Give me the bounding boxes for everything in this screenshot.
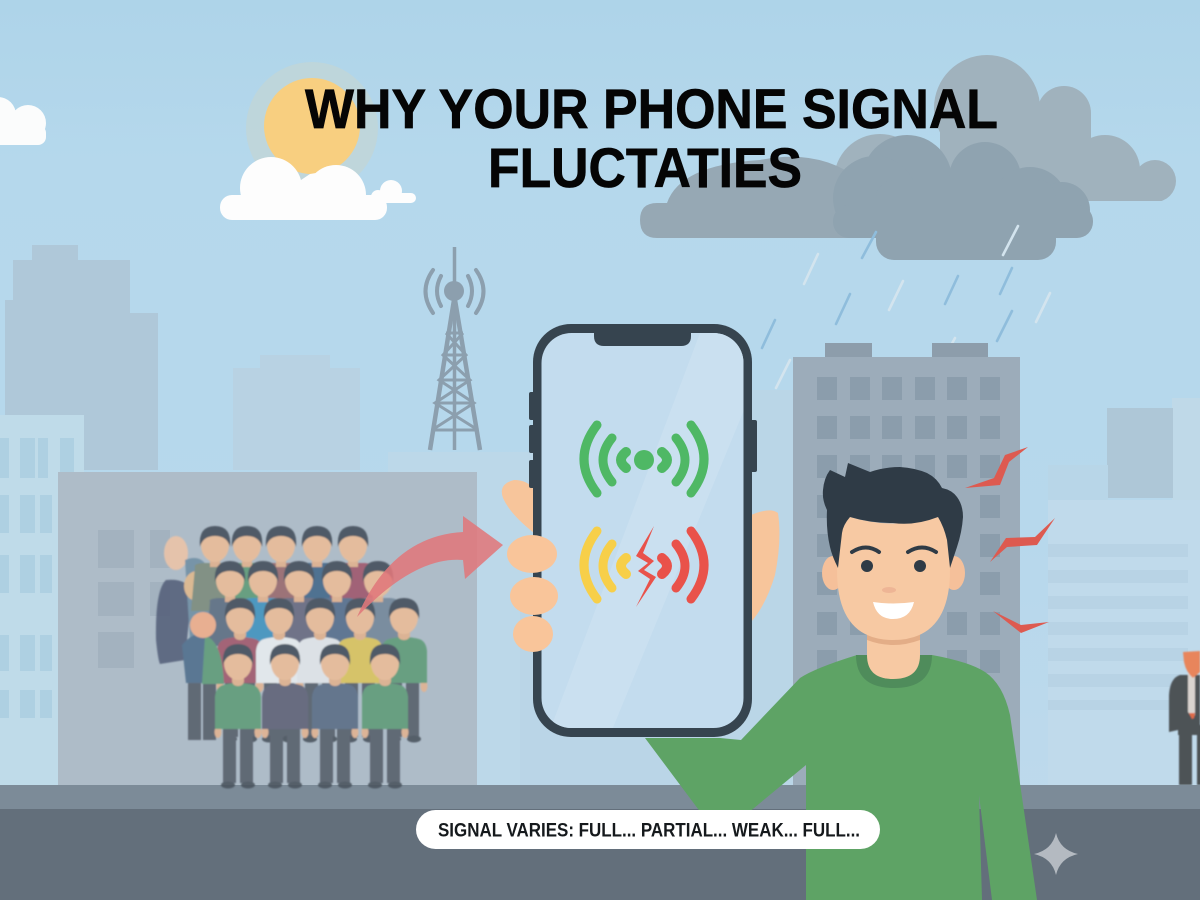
third row of people — [216, 598, 428, 742]
caption pill — [416, 810, 880, 849]
front row of people — [214, 644, 408, 788]
red frustration marks — [965, 447, 1055, 633]
phone body — [533, 324, 752, 737]
man with phone — [645, 463, 1037, 900]
pavement and road — [0, 785, 1200, 900]
distant person right edge — [1169, 651, 1200, 785]
notch — [594, 330, 691, 346]
sweater — [645, 655, 1037, 900]
ears — [822, 556, 965, 590]
icon: full green signal — [584, 425, 704, 493]
smile — [873, 602, 914, 619]
title — [305, 77, 998, 199]
screen glare — [550, 333, 744, 730]
signal tower — [426, 247, 484, 450]
large grey building right — [793, 343, 1020, 785]
neck — [867, 630, 920, 679]
storm cloud — [640, 55, 1176, 260]
light building far left — [0, 415, 84, 785]
background buildings behind phone — [388, 390, 805, 785]
fingers holding phone — [507, 535, 558, 652]
back row of people — [191, 526, 377, 611]
phone side buttons — [529, 392, 757, 488]
red arrow from crowd to phone — [357, 516, 503, 617]
white cloud left edge — [0, 97, 46, 145]
distant buildings left — [5, 245, 360, 470]
rain — [762, 226, 1050, 445]
phone hand behind — [751, 510, 779, 622]
collar — [856, 655, 932, 688]
white cloud under the sun — [220, 157, 416, 225]
phone screen — [542, 333, 744, 728]
eyes — [861, 560, 926, 572]
sparkle watermark — [1034, 833, 1078, 875]
eyebrows — [852, 548, 936, 552]
title: WHY YOUR PHONE SIGNAL — [305, 77, 998, 140]
thumb — [502, 480, 534, 533]
light buildings right — [1048, 398, 1200, 785]
face — [837, 517, 950, 640]
title: FLUCTATIES — [488, 136, 802, 199]
large grey building left — [58, 472, 477, 785]
smartphone — [529, 324, 757, 737]
blurred figures at crowd left — [156, 536, 220, 664]
figure in blue and green — [182, 612, 224, 740]
caption pill: SIGNAL VARIES: FULL... PARTIAL... WEAK... FULL... — [438, 820, 860, 842]
hair — [823, 463, 963, 568]
second row of people — [206, 561, 402, 646]
crowd of people — [156, 526, 427, 788]
sun — [246, 62, 378, 194]
nose — [882, 587, 896, 593]
icon: broken yellow and red signal — [584, 526, 704, 607]
